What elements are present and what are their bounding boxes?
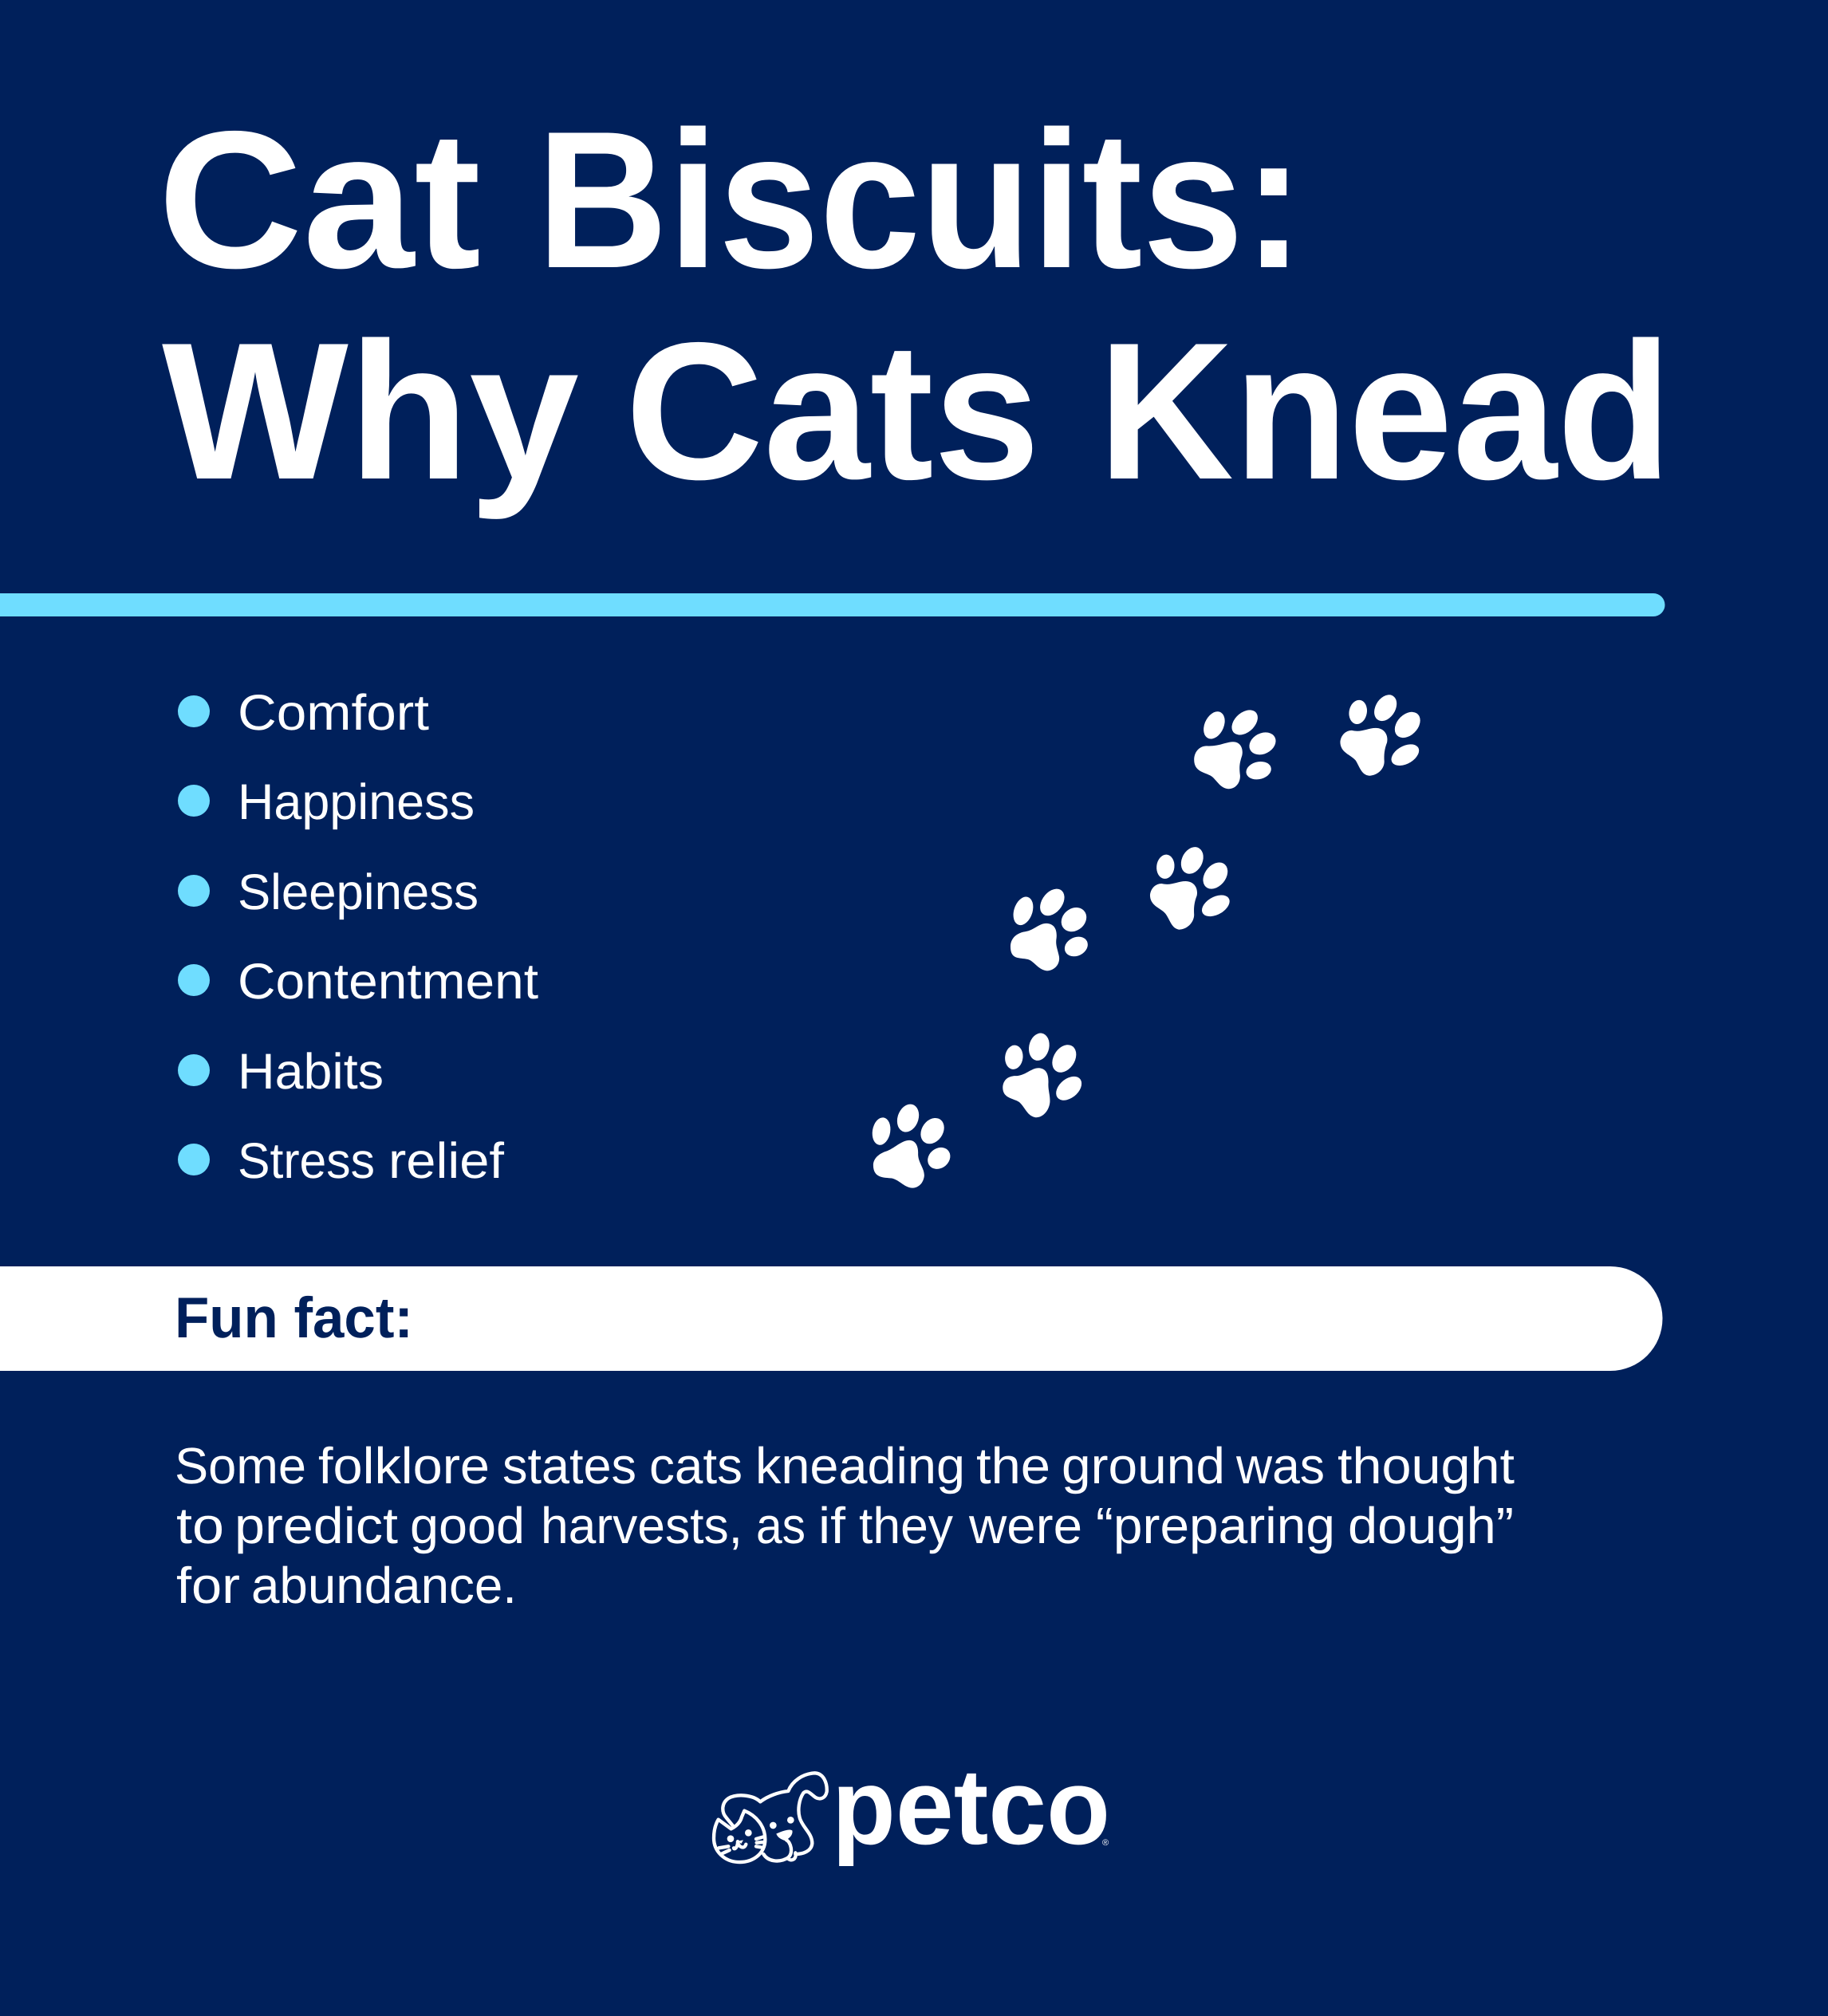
fun fact banner <box>0 1266 1662 1371</box>
body line 2 <box>176 1497 1514 1554</box>
icon: paw print 1 <box>1194 706 1281 789</box>
list item: sleepiness: Sleepiness <box>238 864 479 920</box>
icon: paw print 4 <box>1010 885 1092 971</box>
title line 1: Cat <box>158 90 481 309</box>
body line 2: predict <box>234 1497 398 1554</box>
list item: comfort: Comfort <box>238 685 430 741</box>
list of reasons <box>178 685 539 1189</box>
body line 2: good <box>410 1497 525 1554</box>
body line 1: cats <box>649 1437 743 1494</box>
body line 2: were <box>968 1497 1082 1554</box>
list item: contentment: Contentment <box>238 954 539 1010</box>
list item: habits: Habits <box>238 1044 384 1100</box>
body line 1 <box>175 1437 1515 1494</box>
banner pill <box>0 1266 1662 1371</box>
body line 2: “preparing <box>1096 1497 1335 1554</box>
body line 1: was <box>1235 1437 1325 1494</box>
title line 2: Cats <box>625 301 1040 520</box>
divider bar <box>0 593 1665 616</box>
body line 1: kneading <box>755 1437 965 1494</box>
icon: paw print 2 <box>1340 691 1425 776</box>
list item: happiness: Happiness <box>238 774 475 830</box>
body line 2: they <box>859 1497 953 1554</box>
list item: stress relief: Stress <box>238 1133 375 1189</box>
title line 1 <box>158 90 1304 309</box>
title <box>158 90 1672 520</box>
title line 2: Knead <box>1098 301 1672 520</box>
icon: paw print 5 <box>1003 1032 1086 1117</box>
body line 2: to <box>176 1497 224 1554</box>
list item: stress relief <box>178 1133 505 1189</box>
icon: paw print 3 <box>1150 845 1234 930</box>
body line 1: Some <box>175 1437 306 1494</box>
title line 2 <box>162 301 1672 520</box>
icon: cat and dog mascot <box>714 1773 827 1862</box>
icon: paw print 6 <box>870 1102 955 1188</box>
banner label: Fun fact: <box>175 1286 413 1350</box>
list item: habits <box>178 1044 384 1100</box>
body line 1: thought <box>1338 1437 1515 1494</box>
body line 1: the <box>976 1437 1050 1494</box>
body line 1: folklore <box>318 1437 490 1494</box>
body line 1: ground <box>1062 1437 1225 1494</box>
body line 1: states <box>502 1437 636 1494</box>
fun fact body text <box>175 1437 1515 1614</box>
list item: stress relief: relief <box>388 1133 505 1189</box>
title line 2: Why <box>162 301 579 520</box>
body line 2: as <box>756 1497 806 1554</box>
body line 2: if <box>818 1497 845 1554</box>
registered mark: ® <box>1102 1838 1109 1848</box>
petco logo <box>714 1746 1110 1867</box>
paw prints trail <box>870 691 1425 1188</box>
body line 2: dough” <box>1348 1497 1514 1554</box>
wordmark: petco <box>832 1746 1110 1867</box>
body line 3: for <box>176 1557 240 1614</box>
body line 3: abundance. <box>251 1557 517 1614</box>
title line 1: Biscuits: <box>537 90 1304 309</box>
body line 2: harvests, <box>541 1497 743 1554</box>
